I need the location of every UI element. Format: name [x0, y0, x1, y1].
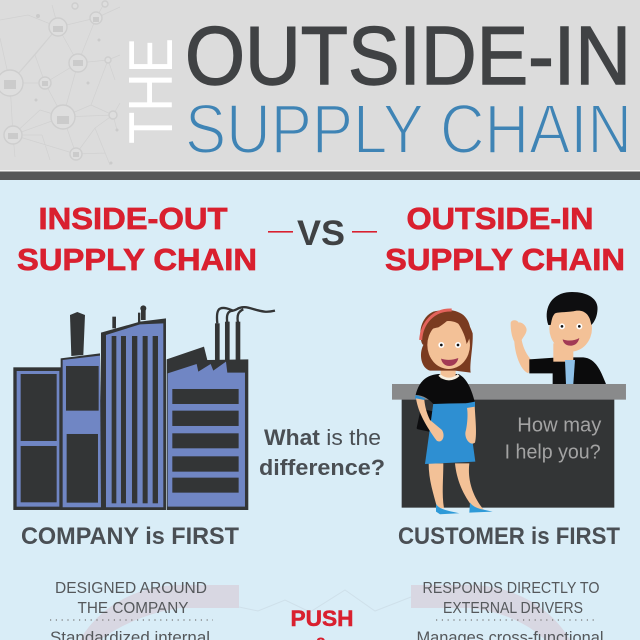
- header panel: [0, 0, 640, 180]
- heading: inside-out supply chain: INSIDE-OUT: [38, 201, 228, 236]
- column: outside-in traits: [416, 580, 604, 640]
- speech on desk: How may: [517, 415, 601, 437]
- question: what is the difference: difference?: [259, 455, 385, 480]
- title: THE: THE: [117, 38, 186, 144]
- column: inside-out traits: DESIGNED AROUND: [55, 580, 207, 597]
- center label: push: PUSH: [290, 606, 354, 631]
- heading: inside-out supply chain: SUPPLY CHAIN: [17, 242, 257, 277]
- versus label: VS: [297, 214, 345, 253]
- heading: outside-in supply chain: OUTSIDE-IN: [406, 201, 594, 236]
- illustration: customer service desk: I help you?: [505, 441, 601, 463]
- network graphic: [0, 1, 120, 165]
- column: outside-in traits: EXTERNAL DRIVERS: [443, 600, 583, 617]
- desk: [392, 384, 626, 508]
- column: inside-out traits: THE COMPANY: [78, 600, 189, 617]
- heading: inside-out supply chain: [17, 201, 257, 277]
- versus label: [268, 214, 377, 253]
- woman: [415, 310, 493, 514]
- heading: outside-in supply chain: [385, 201, 625, 277]
- label: company is first: COMPANY is FIRST: [21, 523, 239, 550]
- heading: outside-in supply chain: SUPPLY CHAIN: [385, 242, 625, 277]
- column: outside-in traits: RESPONDS DIRECTLY TO: [422, 580, 600, 597]
- question: what is the difference: [259, 425, 385, 480]
- arrows: push and pull cycle: [80, 585, 570, 640]
- question: what is the difference: What is the: [264, 425, 381, 450]
- illustration: customer service desk: [392, 292, 626, 514]
- column: inside-out traits: [50, 580, 213, 640]
- icon: factory: [13, 305, 275, 510]
- man behind desk: [511, 292, 606, 384]
- label: customer is first: CUSTOMER is FIRST: [398, 523, 620, 550]
